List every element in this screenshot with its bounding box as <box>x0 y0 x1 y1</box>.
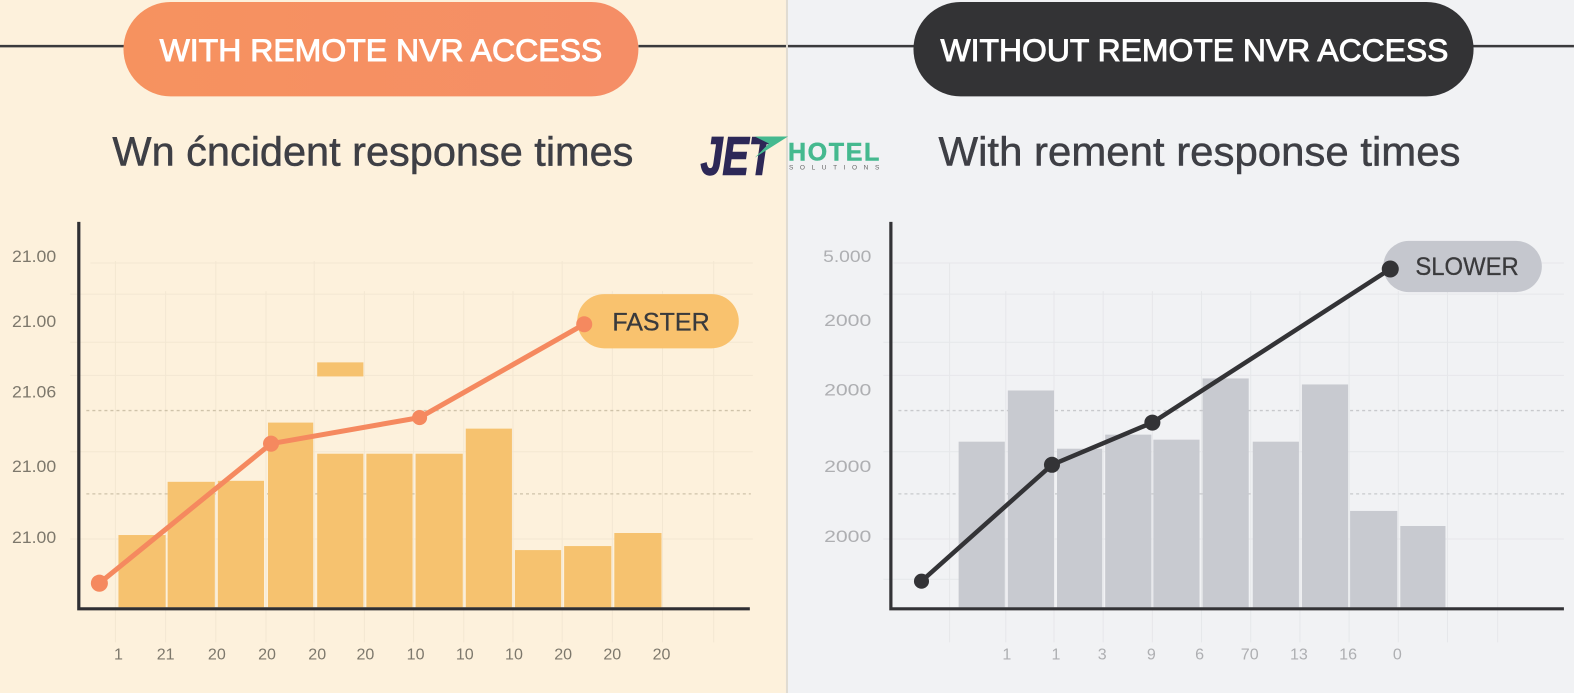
right heading pill: WITHOUT REMOTE NVR ACCESS <box>941 33 1448 68</box>
panel: without remote NVR access <box>786 0 1574 693</box>
left x-axis labels: 20 <box>554 645 572 663</box>
icon: green plane <box>755 137 788 158</box>
right y-axis labels: 2000 <box>824 527 871 546</box>
left x-axis labels: 10 <box>407 645 425 663</box>
left y-axis labels: 21.00 <box>12 247 56 266</box>
left x-axis labels: 20 <box>258 645 276 663</box>
left x-axis labels: 1 <box>114 645 123 663</box>
right bars <box>959 378 1445 607</box>
right x-axis labels: 1 <box>1002 645 1011 663</box>
right y-axis labels: 5.000 <box>823 247 871 266</box>
left x-axis labels: 20 <box>603 645 621 663</box>
right y-axis labels <box>823 247 871 546</box>
panel: with remote NVR access <box>0 0 787 693</box>
left axes <box>79 222 750 609</box>
left subtitle: Wn ćncident response times <box>112 129 633 175</box>
right x-axis labels: 70 <box>1241 645 1259 663</box>
right x-axis labels: 3 <box>1098 645 1107 663</box>
right x-axis labels: 16 <box>1339 645 1357 663</box>
right trend line <box>914 260 1399 589</box>
left y-axis labels: 21.00 <box>12 312 56 331</box>
right axes <box>891 222 1564 609</box>
right x-axis labels: 0 <box>1393 645 1402 663</box>
left x-axis labels: 20 <box>356 645 374 663</box>
right x-axis labels <box>1002 645 1402 663</box>
left x-axis labels: 20 <box>308 645 326 663</box>
logo: Jet Hotel Solutions: HOTEL <box>788 139 879 167</box>
left x-axis labels: 21 <box>157 645 175 663</box>
left x-axis labels <box>114 645 670 663</box>
right subtitle: With rement response times <box>939 129 1461 175</box>
right y-axis labels: 2000 <box>824 380 871 399</box>
right y-axis labels: 2000 <box>824 457 871 476</box>
right callout: slower <box>1383 241 1542 292</box>
left chart <box>12 222 753 663</box>
left x-axis labels: 10 <box>505 645 523 663</box>
right x-axis labels: 1 <box>1052 645 1061 663</box>
right y-axis labels: 2000 <box>824 311 871 330</box>
right x-axis labels: 9 <box>1147 645 1156 663</box>
left x-axis labels: 20 <box>653 645 670 663</box>
left y-axis labels <box>12 247 56 547</box>
right callout: slower: SLOWER <box>1415 253 1519 281</box>
left y-axis labels: 21.06 <box>12 383 56 402</box>
left y-axis labels: 21.00 <box>12 457 56 476</box>
left x-axis labels: 20 <box>208 645 226 663</box>
left trend line <box>91 316 592 592</box>
right x-axis labels: 6 <box>1195 645 1204 663</box>
left callout: faster: FASTER <box>612 308 710 336</box>
left bars <box>118 362 662 607</box>
logo: Jet Hotel Solutions: SOLUTIONS <box>789 165 880 172</box>
logo: Jet Hotel Solutions <box>701 127 880 187</box>
left callout: faster <box>577 294 739 348</box>
right heading pill <box>913 2 1474 96</box>
logo: Jet Hotel Solutions: JET <box>701 127 776 187</box>
left header rule <box>0 45 787 47</box>
left heading pill <box>123 2 638 96</box>
right chart <box>823 222 1564 663</box>
left y-axis labels: 21.00 <box>12 528 56 547</box>
left heading pill: WITH REMOTE NVR ACCESS <box>160 33 602 68</box>
left x-axis labels: 10 <box>456 645 474 663</box>
right header rule <box>788 45 1574 47</box>
right x-axis labels: 13 <box>1290 645 1308 663</box>
